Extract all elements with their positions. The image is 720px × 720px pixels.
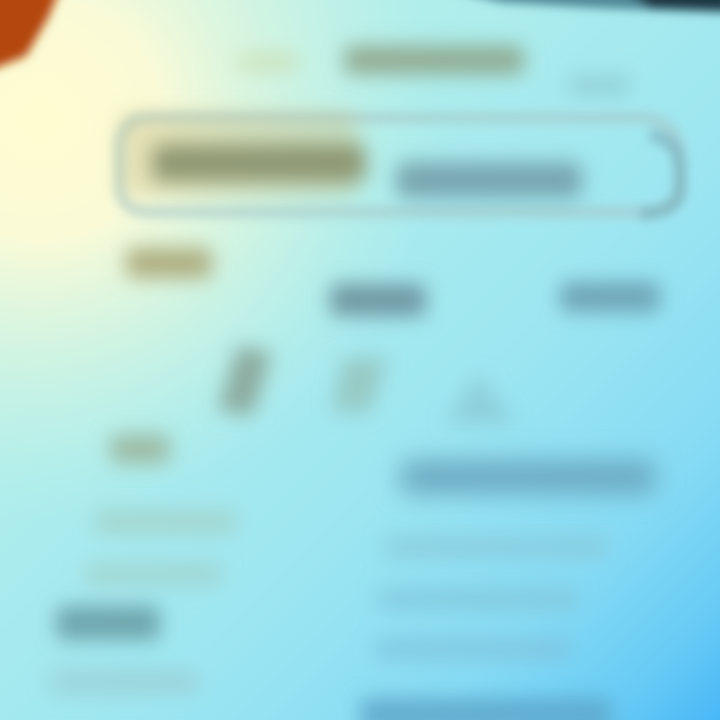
top navigation row — [238, 46, 630, 94]
left lower heading — [56, 606, 160, 640]
left lower text — [50, 670, 198, 694]
icon: diagonal mark — [218, 346, 272, 416]
heading box outline — [120, 118, 680, 214]
photo corner: orange object — [0, 0, 64, 74]
heading text block — [118, 112, 582, 198]
lower left heading — [110, 434, 170, 464]
photo edge: dark strip — [440, 0, 720, 13]
subheading row — [126, 248, 660, 316]
icon: faint mark — [332, 358, 388, 412]
icon: faint triangle — [444, 372, 516, 424]
bottom right text line — [360, 698, 612, 720]
lower right heading — [400, 460, 656, 494]
right text lines — [374, 536, 608, 660]
left text lines — [84, 510, 236, 585]
